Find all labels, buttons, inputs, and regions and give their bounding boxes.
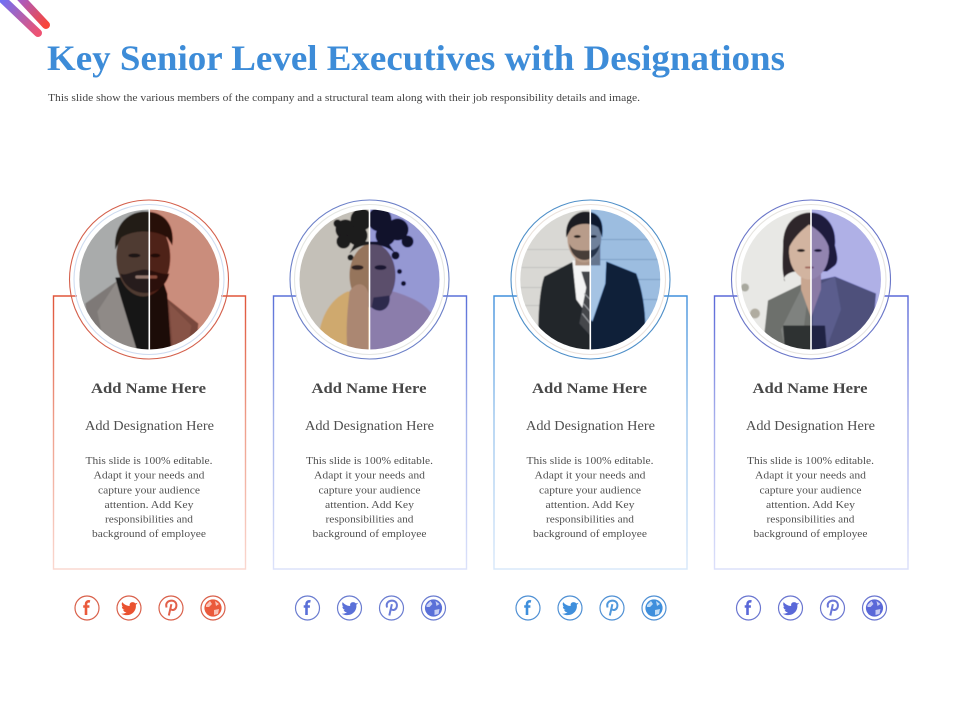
icon: facebook bbox=[736, 596, 760, 620]
decorative diagonal stripes bbox=[0, 0, 46, 33]
description: responsibilities and bbox=[766, 514, 855, 526]
portrait: woman in grey blazer bbox=[739, 208, 883, 352]
name: Add Name Here bbox=[91, 380, 206, 397]
card outline bbox=[714, 296, 908, 569]
icon: facebook bbox=[75, 596, 99, 620]
description: background of employee bbox=[92, 528, 206, 540]
icon: pinterest bbox=[600, 596, 624, 620]
name: Add Name Here bbox=[532, 380, 647, 397]
portrait: man in dark suit bbox=[518, 208, 662, 352]
description bbox=[306, 455, 433, 540]
icon: globe bbox=[201, 596, 225, 620]
description bbox=[86, 455, 213, 540]
designation: Add Designation Here bbox=[85, 419, 214, 434]
icon: pinterest bbox=[159, 596, 183, 620]
social icons bbox=[736, 596, 886, 620]
icon: twitter bbox=[778, 596, 802, 620]
description: Adapt it your needs and bbox=[755, 470, 867, 482]
name: Add Name Here bbox=[752, 380, 868, 397]
description: responsibilities and bbox=[326, 514, 414, 526]
portrait: woman with curly hair bbox=[298, 208, 442, 352]
photo rings bbox=[732, 200, 890, 359]
description: background of employee bbox=[754, 528, 868, 540]
description: Adapt it your needs and bbox=[314, 470, 426, 482]
social icons bbox=[75, 596, 225, 620]
icon: facebook bbox=[516, 596, 540, 620]
name: Add Name Here bbox=[312, 380, 427, 397]
designation: Add Designation Here bbox=[305, 419, 434, 434]
description: attention. Add Key bbox=[766, 499, 856, 511]
description: capture your audience bbox=[539, 484, 641, 496]
card outline bbox=[494, 296, 687, 569]
description bbox=[747, 455, 874, 540]
social icons bbox=[296, 596, 446, 620]
panel: executive 1 bbox=[54, 200, 246, 620]
social icons bbox=[516, 596, 666, 620]
icon: pinterest bbox=[820, 596, 844, 620]
icon: twitter bbox=[338, 596, 362, 620]
description: This slide is 100% editable. bbox=[526, 455, 654, 467]
description: This slide is 100% editable. bbox=[747, 455, 874, 467]
icon: globe bbox=[862, 596, 886, 620]
icon: twitter bbox=[558, 596, 582, 620]
icon: globe bbox=[422, 596, 446, 620]
icon: facebook bbox=[296, 596, 320, 620]
description: capture your audience bbox=[760, 484, 862, 496]
title: Key Senior Level Executives with Designations bbox=[47, 38, 785, 78]
description bbox=[526, 455, 654, 540]
description: Adapt it your needs and bbox=[94, 470, 205, 482]
description: background of employee bbox=[533, 528, 647, 540]
card outline bbox=[54, 296, 246, 569]
panel: executive 4 bbox=[714, 200, 908, 620]
photo rings bbox=[70, 200, 228, 359]
description: attention. Add Key bbox=[104, 499, 194, 511]
description: capture your audience bbox=[318, 484, 421, 496]
card outline bbox=[274, 296, 466, 569]
description: attention. Add Key bbox=[546, 499, 635, 511]
panel: executive 3 bbox=[494, 200, 687, 620]
photo rings bbox=[511, 200, 670, 359]
panel: executive 2 bbox=[274, 200, 466, 620]
description: attention. Add Key bbox=[325, 499, 415, 511]
description: responsibilities and bbox=[105, 514, 194, 526]
description: capture your audience bbox=[98, 484, 200, 496]
description: This slide is 100% editable. bbox=[306, 455, 433, 467]
designation: Add Designation Here bbox=[746, 419, 875, 434]
icon: pinterest bbox=[380, 596, 404, 620]
description: background of employee bbox=[312, 528, 427, 540]
designation: Add Designation Here bbox=[526, 419, 655, 434]
description: Adapt it your needs and bbox=[534, 470, 646, 482]
subtitle: This slide show the various members of the company and a structural team along with their job responsibility details and image. bbox=[48, 93, 640, 104]
icon: twitter bbox=[117, 596, 141, 620]
icon: globe bbox=[642, 596, 666, 620]
description: responsibilities and bbox=[546, 514, 635, 526]
photo rings bbox=[290, 200, 449, 359]
description: This slide is 100% editable. bbox=[86, 455, 213, 467]
portrait: man in turtleneck bbox=[77, 208, 221, 352]
